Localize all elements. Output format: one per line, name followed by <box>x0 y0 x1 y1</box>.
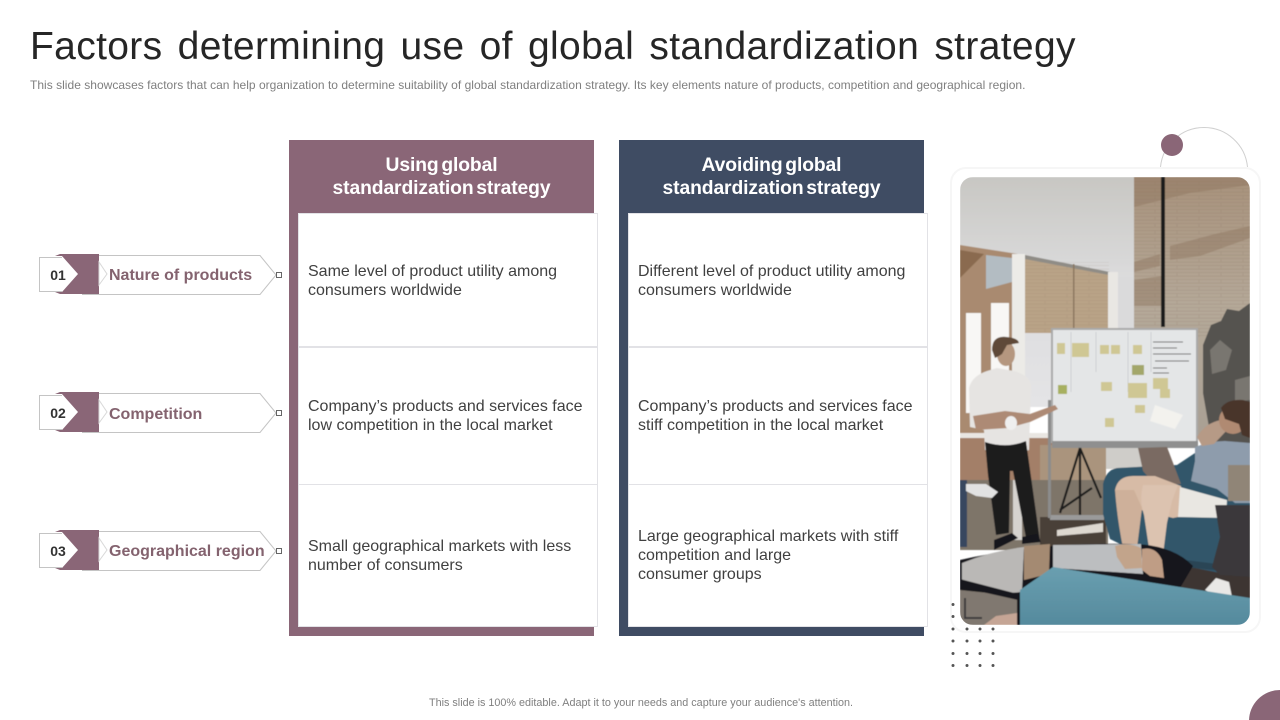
cell: large markets: Large geographical markets with stiff <box>638 528 898 545</box>
photo frame <box>950 167 1261 633</box>
cell: stiff competition: stiff competition in the local market <box>638 417 883 434</box>
easel <box>1060 448 1101 515</box>
cell: low competition <box>298 347 598 485</box>
decorative arc and dot <box>1160 127 1248 167</box>
table frame and lower floor <box>960 590 1018 625</box>
panel: avoiding global standardization strategy <box>619 140 924 636</box>
cell: small markets: number of consumers <box>308 557 463 574</box>
heading: avoiding <box>663 155 880 199</box>
laptop <box>1138 447 1181 485</box>
sofa <box>1103 445 1250 573</box>
cell: small markets <box>298 484 598 627</box>
photo: team meeting at whiteboard <box>960 177 1250 625</box>
heading: using <box>333 155 550 199</box>
dot grid <box>952 603 994 667</box>
cell: large markets: competition and large <box>638 547 791 564</box>
corner quarter circle <box>1249 690 1280 720</box>
panel: using global standardization strategy <box>289 140 594 636</box>
seated man <box>1191 441 1250 503</box>
cell: different level of utility: consumers worldwide <box>638 282 792 299</box>
row label: nature of products <box>39 254 282 295</box>
row label: nature of products: 01 <box>50 267 66 283</box>
row label: geographical region <box>39 530 282 571</box>
heading: using: standardization strategy <box>333 178 550 199</box>
seated man's legs and shorts <box>1115 476 1183 518</box>
cell: low competition: Company’s products and services face <box>308 398 583 415</box>
heading: avoiding: standardization strategy <box>663 178 880 199</box>
cell: same level of utility <box>298 213 598 347</box>
cell: stiff competition <box>628 347 928 485</box>
glass table <box>960 542 1193 595</box>
brick wall <box>1134 177 1250 437</box>
heading: using: Using global <box>386 155 498 176</box>
heading: avoiding: Avoiding global <box>702 155 841 176</box>
cell: low competition: low competition in the local market <box>308 417 553 434</box>
row label: competition <box>39 392 282 433</box>
row label: nature of products: Nature of products <box>109 267 252 284</box>
window <box>960 245 1018 444</box>
wall <box>960 177 1136 407</box>
footer note: This slide is 100% editable. Adapt it to your needs and capture your audience's attention. <box>429 697 853 709</box>
cell: stiff competition: Company’s products and services face <box>638 398 913 415</box>
subtitle: This slide showcases factors that can help organization to determine suitability of global standardization strategy. Its key elements nature of products, competition and geographical region. <box>30 78 1025 92</box>
title: Factors determining use of global standardization strategy <box>30 25 1076 68</box>
floor <box>960 480 1108 550</box>
dark damaged wall <box>1202 303 1250 444</box>
rug <box>1020 567 1250 625</box>
row label: competition: 02 <box>50 405 66 421</box>
row label: competition: Competition <box>109 406 202 423</box>
cell: different level of utility: Different level of product utility among <box>638 263 905 280</box>
lower wall <box>960 432 1048 439</box>
cell: same level of utility: Same level of product utility among <box>308 263 557 280</box>
cell: small markets: Small geographical markets with less <box>308 538 571 555</box>
cell: large markets <box>628 484 928 627</box>
row label: geographical region: 03 <box>50 543 66 559</box>
left jeans and shoe <box>960 480 967 547</box>
cell: same level of utility: consumers worldwide <box>308 282 462 299</box>
brick panel <box>1025 256 1109 333</box>
standing presenter <box>969 337 1058 550</box>
cell: large markets: consumer groups <box>638 566 762 583</box>
cell: different level of utility <box>628 213 928 347</box>
whiteboard <box>1052 329 1197 442</box>
row label: geographical region: Geographical region <box>109 543 265 560</box>
